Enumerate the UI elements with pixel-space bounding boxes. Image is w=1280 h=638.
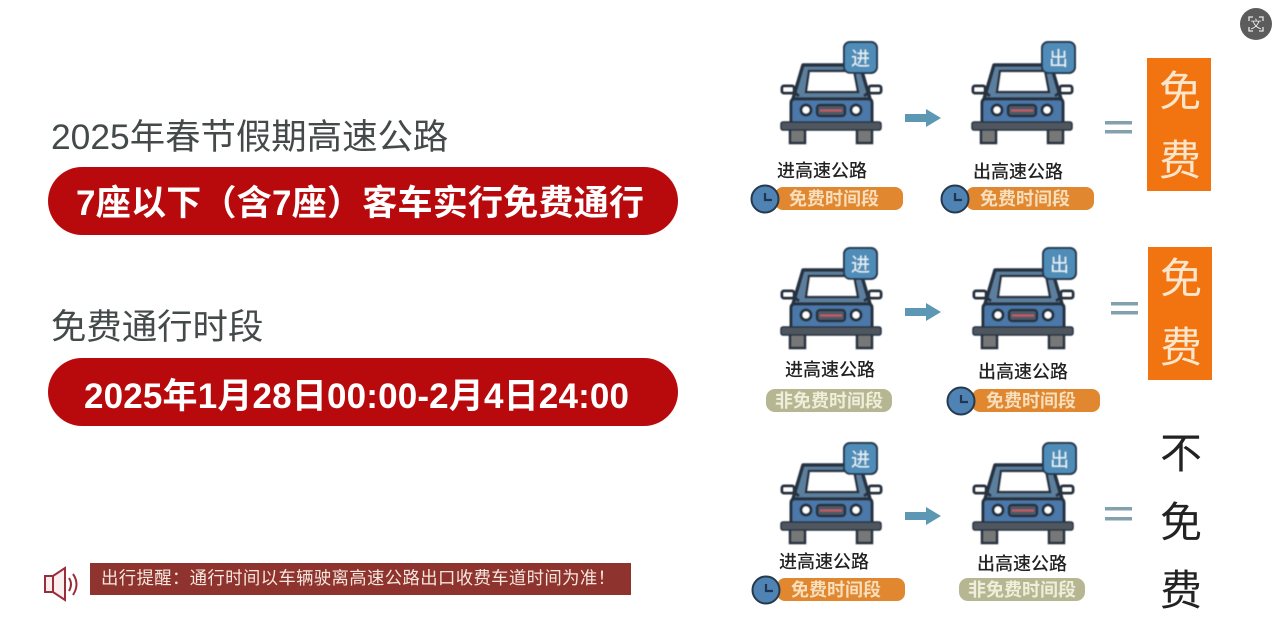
callout: travel reminder: 出行提醒：通行时间以车辆驶离高速公路出口收费车道时间为准！ bbox=[101, 568, 615, 588]
banner: free passage for small passenger cars: 7座以下（含7座）客车实行免费通行 bbox=[76, 184, 644, 223]
icon: entry car bbox=[781, 248, 881, 348]
result: not free: 费 bbox=[1160, 567, 1202, 614]
label: enter expressway: 进高速公路 bbox=[779, 552, 869, 572]
icon: entry car: 进 bbox=[851, 254, 870, 276]
label: exit expressway: 出高速公路 bbox=[977, 554, 1067, 574]
status: free period: 免费时间段 bbox=[791, 579, 881, 600]
icon: entry car: 进 bbox=[851, 48, 870, 70]
status: non-free period: 非免费时间段 bbox=[968, 579, 1076, 600]
status: free period bbox=[942, 186, 1094, 212]
equals sign bbox=[1105, 121, 1132, 134]
icon: translate button: 文 bbox=[1250, 17, 1262, 31]
status: free period: 免费时间段 bbox=[789, 188, 879, 209]
icon: entry car bbox=[781, 42, 881, 143]
result: free: 免 bbox=[1160, 255, 1202, 302]
icon: exit car: 出 bbox=[1050, 449, 1069, 471]
equals sign bbox=[1105, 507, 1132, 520]
icon: entry car: 进 bbox=[851, 449, 870, 471]
label: enter expressway: 进高速公路 bbox=[785, 360, 875, 380]
panel: row 1, free entry and free exit bbox=[752, 42, 1211, 212]
arrow bbox=[905, 507, 941, 525]
panel: row 2, non-free entry and free exit bbox=[766, 247, 1212, 414]
result: free: 费 bbox=[1159, 137, 1201, 184]
status: free period bbox=[752, 186, 903, 212]
icon: exit car bbox=[973, 248, 1076, 348]
result: free: 免 bbox=[1159, 68, 1201, 115]
status: free period: 免费时间段 bbox=[986, 390, 1076, 411]
heading: holiday expressway: 2025年春节假期高速公路 bbox=[51, 117, 448, 157]
icon: speaker bbox=[45, 568, 76, 600]
panel: row 3, free entry and non-free exit bbox=[752, 430, 1202, 614]
icon: exit car bbox=[972, 42, 1075, 143]
arrow bbox=[905, 303, 941, 321]
status: free period bbox=[752, 576, 905, 604]
icon: exit car: 出 bbox=[1050, 254, 1069, 276]
label: enter expressway: 进高速公路 bbox=[777, 161, 867, 181]
result: not free bbox=[1160, 430, 1202, 614]
status: non-free period: 非免费时间段 bbox=[775, 390, 883, 411]
result: not free: 不 bbox=[1160, 430, 1202, 477]
result: free bbox=[1147, 58, 1211, 191]
result: not free: 免 bbox=[1160, 499, 1202, 546]
label: exit expressway: 出高速公路 bbox=[973, 162, 1063, 182]
icon: exit car bbox=[973, 443, 1076, 543]
result: free bbox=[1148, 247, 1212, 380]
icon: exit car: 出 bbox=[1049, 48, 1068, 70]
icon: entry car bbox=[781, 443, 881, 543]
callout: travel reminder bbox=[90, 563, 631, 595]
status: free period: 免费时间段 bbox=[980, 188, 1070, 209]
result: free: 费 bbox=[1160, 324, 1202, 371]
status: free period bbox=[948, 388, 1100, 414]
label: exit expressway: 出高速公路 bbox=[978, 362, 1068, 382]
banner: free period dates bbox=[48, 358, 678, 426]
banner: free passage for small passenger cars bbox=[48, 167, 678, 235]
heading: free passage period: 免费通行时段 bbox=[51, 307, 263, 347]
equals sign bbox=[1111, 302, 1138, 314]
banner: free period dates: 2025年1月28日00:00-2月4日24:00 bbox=[84, 377, 629, 416]
icon: translate button bbox=[1240, 8, 1272, 40]
arrow bbox=[905, 109, 941, 127]
